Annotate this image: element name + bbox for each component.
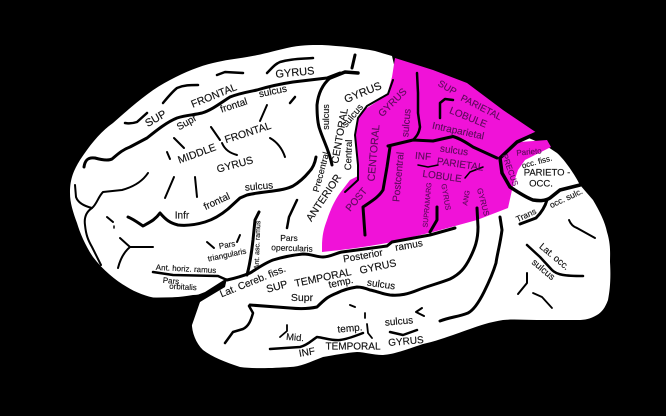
- occipital labels: Lat. occ.: [537, 241, 571, 273]
- temporal lobe labels: GYRUS: [358, 257, 398, 277]
- occipital labels: occ. sulc.: [548, 186, 584, 210]
- frontal lobe labels: FRONTAL: [223, 120, 273, 146]
- temporal lobe labels: SUP: [265, 278, 289, 296]
- temporal lobe labels: TEMPORAL: [294, 266, 353, 290]
- frontal lobe labels: MIDDLE: [176, 142, 218, 166]
- occipital labels: [514, 154, 584, 283]
- occipital labels: OCC.: [529, 178, 553, 190]
- temporal lobe labels: Lat. Cereb. fiss.: [218, 264, 288, 300]
- occipital labels: Trans: [514, 206, 538, 224]
- frontal lobe labels: ANTERIOR: [304, 172, 344, 224]
- parietal lobe labels: SUP: [436, 78, 458, 98]
- parietal lobe labels: Parieto: [516, 146, 543, 158]
- temporal lobe labels: GYRUS: [388, 335, 425, 349]
- temporal lobe labels: [218, 238, 425, 360]
- frontal lobe labels: Central: [343, 140, 355, 170]
- frontal lobe labels: GYRUS: [275, 65, 315, 81]
- lateral fissure wedge: [130, 278, 227, 330]
- parietal lobe labels: SUPRAMARG: [423, 182, 433, 228]
- parietal lobe labels: sulcus: [400, 108, 414, 138]
- temporal lobe labels: TEMPORAL: [325, 342, 381, 352]
- inferior frontal labels: [156, 220, 313, 292]
- frontal lobe labels: [143, 65, 383, 224]
- parietal lobe labels: CENTORAL: [366, 124, 382, 182]
- parietal lobe labels: INF: [414, 151, 432, 163]
- inferior frontal labels: Pars: [162, 276, 180, 286]
- parietal lobe labels: GYRUS: [439, 183, 453, 211]
- frontal lobe labels: frontal: [202, 191, 232, 213]
- frontal lobe labels: sulcus: [244, 180, 274, 194]
- temporal lobe labels: sulcus: [384, 315, 414, 329]
- occipital labels: PARIETO -: [524, 168, 570, 178]
- temporal lobe labels: Mid.: [286, 332, 304, 344]
- parietal lobe labels: GYRUS: [475, 187, 491, 217]
- parietal lobe labels: Intraparietal: [431, 121, 485, 142]
- temporal lobe labels: ramus: [394, 238, 424, 254]
- temporal lobe labels: temp.: [328, 275, 354, 291]
- parietal lobe labels: PARIETAL: [459, 93, 503, 123]
- frontal lobe labels: sulcus: [321, 104, 331, 130]
- inferior frontal labels: orbitalis: [169, 282, 197, 292]
- frontal lobe labels: Precentral: [311, 151, 331, 193]
- occipital labels: occ. fiss.: [521, 154, 553, 170]
- inferior frontal labels: opercularis: [271, 242, 313, 254]
- temporal lobe labels: temp.: [337, 322, 363, 336]
- parietal lobe labels: LOBULE: [422, 169, 463, 185]
- sulci lines: [75, 55, 595, 349]
- temporal lobe labels: sulcus: [366, 278, 396, 292]
- parietal lobe labels: Postcentral: [391, 152, 407, 202]
- frontal lobe labels: GYRUS: [343, 80, 383, 106]
- inferior frontal labels: Ant. asc. ramus: [254, 220, 262, 269]
- frontal lobe labels: GYRUS: [215, 154, 255, 176]
- inferior frontal labels: Pars: [280, 233, 298, 243]
- parietal lobe labels: [344, 78, 543, 228]
- parietal lobe labels: LOBULE: [448, 106, 489, 131]
- frontal lobe labels: FRONTAL: [189, 81, 239, 111]
- frontal lobe labels: sulcus: [340, 102, 366, 130]
- frontal lobe labels: frontal: [219, 96, 249, 116]
- highlighted parietal lobe: [322, 58, 551, 252]
- parietal lobe labels: ANG: [462, 190, 472, 206]
- parietal lobe labels: PRECUS: [500, 153, 520, 187]
- temporal lobe labels: Supr: [291, 292, 314, 304]
- brain outline: [70, 45, 610, 368]
- temporal lobe labels: INF: [298, 346, 316, 360]
- frontal lobe labels: sulcus: [258, 84, 288, 100]
- inferior frontal labels: Ant. horiz. ramus: [156, 263, 216, 275]
- temporal lobe labels: Posterior: [342, 247, 384, 265]
- frontal lobe labels: SUP: [143, 108, 169, 130]
- parietal lobe labels: POST: [344, 186, 370, 214]
- parietal lobe labels: sulcus: [439, 144, 469, 158]
- inferior frontal labels: Pars: [218, 239, 236, 251]
- frontal lobe labels: CENTORAL: [330, 107, 351, 164]
- parietal lobe labels: GYRUS: [377, 86, 410, 119]
- occipital labels: sulcus: [529, 257, 557, 283]
- parietal lobe labels: PARIETAL: [436, 156, 484, 174]
- inferior frontal labels: triangularis: [207, 247, 247, 263]
- frontal lobe labels: Supr: [175, 113, 199, 133]
- frontal lobe labels: Infr: [175, 210, 190, 222]
